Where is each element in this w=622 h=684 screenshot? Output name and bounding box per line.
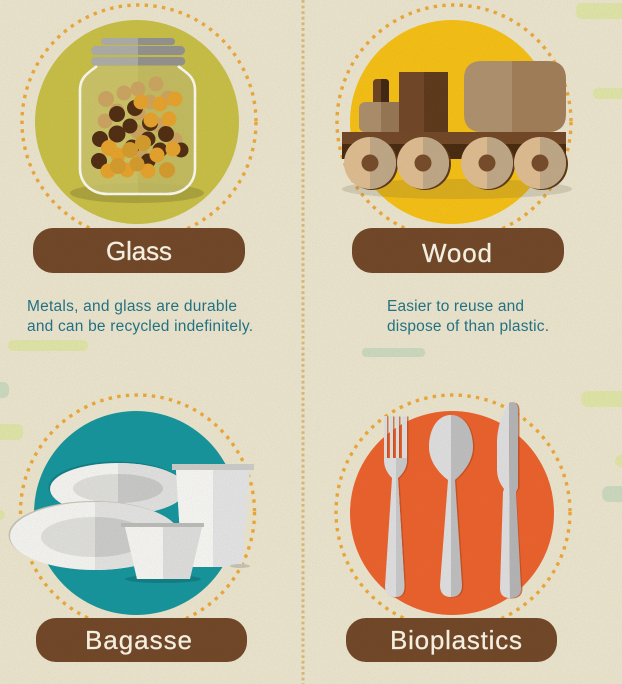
dotted ring [337,5,571,239]
teal circle [34,411,238,615]
truck shadow [342,179,572,199]
label pill: Glass: Glass [106,236,172,266]
text: glass description [27,298,253,335]
background accent stripes [0,3,622,520]
icon: plates and cups [8,462,254,583]
text: glass description: and can be recycled indefinitely. [27,318,253,335]
text: wood description [387,298,549,335]
panel: wood [337,5,572,335]
text: wood description: Easier to reuse and [387,298,524,315]
icon: spoon [429,415,474,598]
icon: fork [384,416,408,598]
label pill: Bagasse: Bagasse [85,625,192,655]
dotted ring [22,5,256,239]
label pill: Wood: Wood [422,238,492,268]
label pill: Bioplastics [346,618,557,662]
dotted ring [336,395,570,629]
jar shadow [70,183,204,203]
dotted ring [20,395,254,629]
panel: glass [22,5,256,335]
olive circle [35,20,239,224]
centre dotted divider [302,0,304,684]
text: glass description: Metals, and glass are durable [27,298,237,315]
label pill: Bioplastics: Bioplastics [390,625,522,655]
panel: bagasse [8,395,254,662]
yellow circle [350,20,554,224]
icon: jar of beans [80,38,198,196]
icon: wooden toy truck [342,61,568,190]
text: wood description: dispose of than plastic. [387,318,549,335]
orange circle [350,411,554,615]
label pill: Glass [33,228,245,273]
icon: knife [497,402,522,598]
label pill: Bagasse [36,618,247,662]
label pill: Wood [352,228,564,273]
panel: bioplastics [336,395,570,662]
